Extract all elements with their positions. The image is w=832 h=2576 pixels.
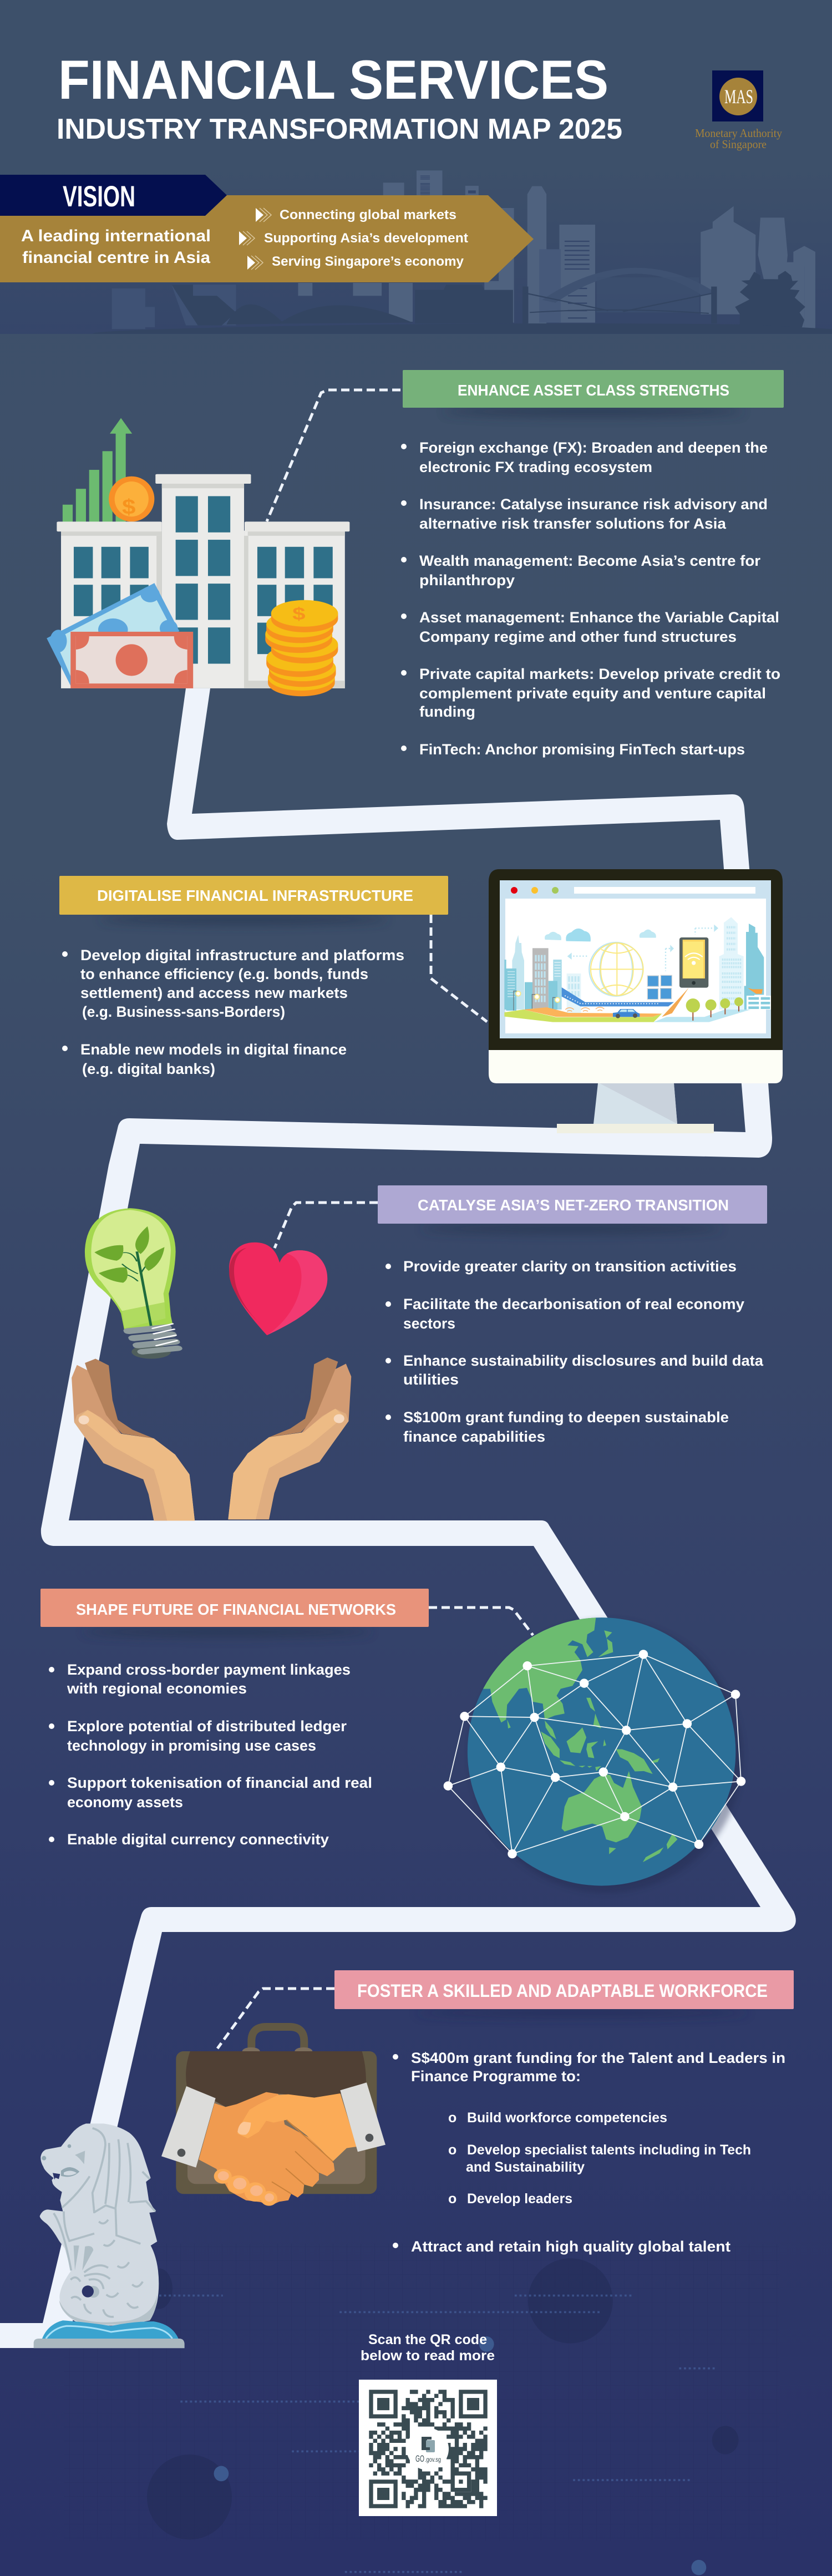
illustration: globe with network — [444, 1615, 745, 1893]
bullet list: asset class strengths: philanthropy — [419, 572, 515, 589]
bullet list: workforce: Finance Programme to: — [411, 2068, 581, 2085]
logo: Monetary Authority of Singapore: MAS — [724, 85, 753, 108]
heading: catalyse Asia's net-zero transition: CATALYSE ASIA’S NET-ZERO TRANSITION — [418, 1196, 729, 1214]
illustration: bank buildings with money — [47, 418, 349, 696]
browser buttons and address bar — [511, 887, 755, 894]
coin stack — [265, 600, 338, 696]
sub-bullets: and Sustainability — [466, 2159, 585, 2175]
solar panels — [647, 975, 672, 1000]
QR centre logo: .gov.sg — [425, 2456, 441, 2463]
bullet list: digital infrastructure: (e.g. digital banks) — [82, 1061, 215, 1077]
section 2: digitalise financial infrastructure — [59, 869, 783, 1133]
light bulb with plant — [85, 1208, 184, 1359]
illustration: desktop monitor — [489, 869, 783, 1133]
bullet list: financial networks: with regional economies — [67, 1680, 247, 1697]
merlion shading — [54, 2128, 155, 2317]
main title: FINANCIAL SERVICES — [58, 49, 608, 110]
section 1: enhance asset class strengths — [47, 370, 784, 758]
heading bar shadow — [444, 407, 743, 417]
bullet list: workforce — [393, 2050, 785, 2255]
right hand — [228, 1357, 351, 1519]
section 4: shape future of financial networks — [40, 1589, 745, 1893]
bullet list: net-zero: Facilitate the decarbonisation of real economy — [403, 1296, 744, 1312]
QR caption: Scan the QR code — [368, 2332, 487, 2347]
bullet list: digital infrastructure: settlement) and access new markets — [80, 985, 348, 1001]
bullet list: financial networks: economy assets — [67, 1794, 183, 1811]
vision banner — [0, 175, 534, 282]
coin stack: $ — [292, 604, 306, 623]
tablet — [679, 937, 708, 988]
bullet list: asset class strengths: funding — [419, 703, 475, 720]
QR code call to action — [359, 2332, 497, 2516]
heading: digitalise financial infrastructure — [59, 876, 448, 915]
bullet list: net-zero: utilities — [403, 1371, 459, 1388]
vision bullet: supporting Asia's development: Supporting Asia’s development — [264, 231, 468, 246]
vision bullet: connecting global markets: Connecting global markets — [280, 207, 456, 222]
sub-bullets — [448, 2110, 751, 2207]
monitor frame — [489, 869, 783, 1050]
network nodes — [444, 1650, 745, 1858]
heading: enhance asset class strengths: ENHANCE ASSET CLASS STRENGTHS — [458, 382, 729, 399]
bullet list: asset class strengths: complement private equity and venture capital — [419, 685, 766, 702]
globe disc — [468, 1617, 735, 1886]
bullet list: asset class strengths: Company regime and other fund structures — [419, 628, 737, 645]
bullet list: workforce: Attract and retain high quality global talent — [411, 2238, 730, 2255]
shirt cuffs — [161, 2082, 385, 2168]
sub-bullets: o — [448, 2142, 456, 2158]
bullet list: net-zero — [385, 1258, 764, 1445]
clouds — [545, 929, 656, 941]
bullet list: net-zero: S$100m grant funding to deepen sustainable — [403, 1409, 729, 1426]
illustration: hands, bulb and heart — [72, 1208, 351, 1520]
street lamps — [514, 991, 560, 1011]
main title: INDUSTRY TRANSFORMATION MAP 2025 — [57, 113, 622, 145]
vision statement: A leading international — [21, 227, 211, 245]
heading: shape future of financial networks: SHAPE FUTURE OF FINANCIAL NETWORKS — [76, 1601, 396, 1618]
bullet list: financial networks: technology in promising use cases — [67, 1737, 316, 1754]
heart — [229, 1243, 327, 1335]
heading: shape future of financial networks — [40, 1589, 429, 1627]
blue banknote — [47, 583, 179, 688]
bullet list: financial networks: Enable digital currency connectivity — [67, 1831, 329, 1848]
wifi icons — [565, 1007, 604, 1011]
bullet list: net-zero: sectors — [403, 1315, 455, 1332]
bullet list: workforce: S$400m grant funding for the Talent and Leaders in — [411, 2050, 785, 2066]
trees — [686, 997, 743, 1021]
illustration: Merlion statue — [34, 2123, 185, 2348]
bullet list: asset class strengths: Private capital markets: Develop private credit to — [419, 666, 780, 682]
bullet list: financial networks — [49, 1661, 372, 1848]
bullet list: financial networks: Explore potential of distributed ledger — [67, 1718, 347, 1735]
winding road path — [0, 688, 796, 2348]
red banknote — [70, 632, 193, 688]
main title — [57, 49, 622, 145]
heading: digitalise financial infrastructure: DIGITALISE FINANCIAL INFRASTRUCTURE — [97, 887, 413, 904]
bullet list: digital infrastructure: Enable new models in digital finance — [80, 1041, 347, 1058]
heading: enhance asset class strengths — [403, 370, 784, 408]
vision heading: VISION — [63, 180, 135, 213]
coin with dollar: $ — [122, 495, 136, 519]
bullet list: digital infrastructure: Develop digital infrastructure and platforms — [80, 947, 404, 964]
shaking hands — [199, 2092, 357, 2206]
bullet list: asset class strengths — [401, 439, 780, 758]
bullet list: net-zero: finance capabilities — [403, 1428, 545, 1445]
QR caption: below to read more — [361, 2348, 495, 2364]
bullet list: asset class strengths: Insurance: Catalyse insurance risk advisory and — [419, 496, 768, 513]
heading: foster a skilled and adaptable workforce: FOSTER A SKILLED AND ADAPTABLE WORKFORCE — [357, 1981, 768, 2001]
bullet list: net-zero: Provide greater clarity on transition activities — [403, 1258, 737, 1275]
briefcase — [176, 2027, 377, 2194]
QR caption — [361, 2332, 495, 2364]
merlion body — [40, 2123, 159, 2326]
sub-bullets: o — [448, 2191, 456, 2207]
bullet list: digital infrastructure: (e.g. Business-sans-Borders) — [82, 1003, 285, 1020]
bullet list: asset class strengths: Asset management: Enhance the Variable Capital — [419, 609, 779, 626]
bullet list: asset class strengths: FinTech: Anchor promising FinTech start-ups — [419, 741, 745, 758]
QR centre logo: GO — [415, 2453, 424, 2464]
background pattern: grid and dots — [64, 2244, 779, 2575]
vision statement: financial centre in Asia — [22, 249, 210, 267]
bullet list: asset class strengths: Foreign exchange (FX): Broaden and deepen the — [419, 439, 768, 456]
bullet list: financial networks: Expand cross-border payment linkages — [67, 1661, 351, 1678]
sub-bullets: Build workforce competencies — [467, 2110, 667, 2126]
vision bullet: serving Singapore's economy: Serving Singapore’s economy — [272, 254, 464, 269]
bullet list: digital infrastructure — [62, 947, 404, 1077]
section 5: foster a skilled and adaptable workforce — [161, 1970, 794, 2255]
dotted arrows — [567, 925, 718, 971]
monitor stand — [593, 1083, 677, 1124]
bullet list: asset class strengths: electronic FX trading ecosystem — [419, 459, 652, 475]
left hand — [72, 1359, 195, 1520]
land masses — [483, 1617, 678, 1862]
QR centre logo — [407, 2428, 449, 2470]
bullet list: asset class strengths: alternative risk transfer solutions for Asia — [419, 515, 727, 532]
sub-bullets: Develop leaders — [467, 2191, 572, 2207]
heading: foster a skilled and adaptable workforce — [334, 1970, 794, 2009]
screen illustration: smart city — [504, 917, 771, 1022]
growth bars and arrow — [63, 418, 132, 522]
logo: Monetary Authority of Singapore — [695, 70, 782, 151]
network edges — [448, 1654, 741, 1854]
road and ground — [562, 987, 674, 1006]
sub-bullets: Develop specialist talents including in Tech — [467, 2142, 751, 2158]
heading: catalyse Asia's net-zero transition — [378, 1185, 767, 1224]
building — [57, 474, 349, 688]
section 3: catalyse Asia's net-zero transition — [72, 1185, 767, 1520]
bullet list: asset class strengths: Wealth management: Become Asia’s centre for — [419, 552, 761, 569]
QR code — [359, 2380, 497, 2516]
logo: Monetary Authority of Singapore: Monetary Authority — [695, 126, 782, 140]
sub-bullets: o — [448, 2110, 456, 2126]
vision statement — [21, 227, 211, 267]
bullet list: net-zero: Enhance sustainability disclosures and build data — [403, 1352, 764, 1369]
vision navy label — [0, 175, 227, 216]
bullet list: digital infrastructure: to enhance efficiency (e.g. bonds, funds — [80, 966, 368, 982]
illustration: briefcase and handshake — [161, 2027, 385, 2206]
car — [613, 1009, 640, 1018]
skyline silhouette — [0, 166, 832, 334]
vision gold arrow panel — [0, 195, 534, 282]
bullet list: financial networks: Support tokenisation of financial and real — [67, 1774, 372, 1791]
globe — [589, 942, 643, 996]
logo: Monetary Authority of Singapore: of Singapore — [710, 138, 767, 151]
coin with dollar — [109, 476, 154, 521]
merlion base — [42, 2320, 179, 2339]
